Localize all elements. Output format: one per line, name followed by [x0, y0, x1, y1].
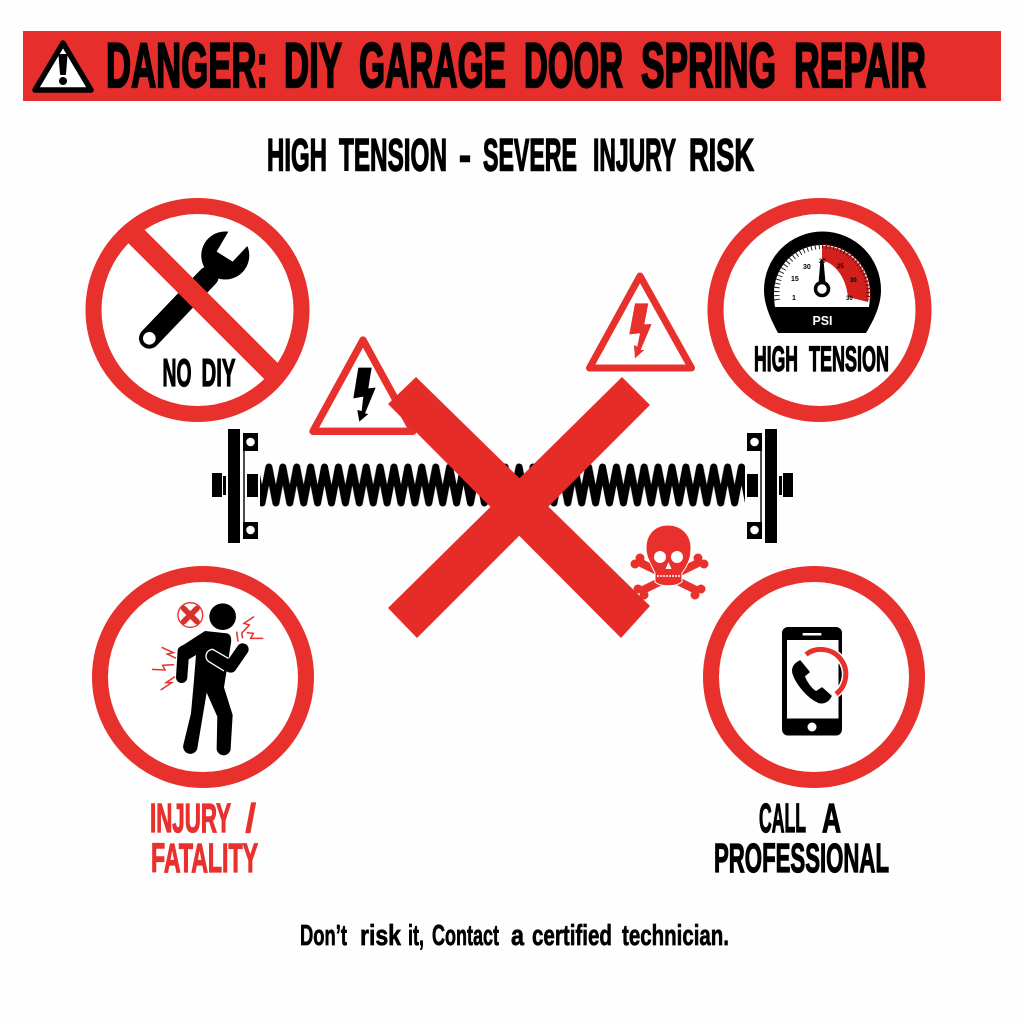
title: GARAGE [359, 31, 506, 101]
subtitle: HIGH [267, 130, 327, 180]
subtitle: SEVERE [483, 130, 577, 180]
label: call a professional [714, 795, 889, 881]
subtitle: - [459, 130, 471, 180]
big red X [388, 377, 650, 638]
title: SPRING [641, 31, 776, 101]
footer note [300, 920, 729, 952]
coil spring [260, 463, 745, 507]
label: injury / fatality: INJURY [150, 795, 231, 841]
label: injury / fatality: FATALITY [151, 835, 258, 881]
label: high tension: TENSION [809, 340, 889, 379]
label: no DIY: NO [162, 352, 192, 395]
spring assembly [212, 429, 793, 543]
icon: prohibition slash [128, 228, 272, 372]
icon: pressure gauge: PSI [812, 313, 832, 328]
icon: pain sparks [152, 617, 263, 690]
panel: no DIY [94, 206, 302, 414]
footer note: Contact [432, 920, 499, 952]
footer note: technician. [622, 920, 729, 952]
panel: call a professional [711, 574, 917, 780]
icon: pressure gauge: 30 [846, 296, 853, 302]
icon: pressure gauge: 30 [850, 278, 857, 284]
title: DOOR [524, 31, 623, 101]
subtitle: INJURY [593, 130, 676, 180]
icon: wrench [143, 231, 249, 345]
icon: pressure gauge: 1 [792, 295, 796, 302]
icon: pressure gauge: 30 [803, 264, 811, 271]
icon: skull and crossbones [630, 525, 708, 600]
label: high tension [754, 340, 889, 379]
label: injury / fatality: / [245, 795, 256, 841]
footer note: Don’t [300, 920, 347, 952]
icon: red call arc [806, 649, 846, 694]
icon: left electric warning triangle [313, 340, 413, 431]
subtitle: TENSION [339, 130, 447, 180]
title: REPAIR [794, 31, 926, 101]
footer note: a [511, 920, 525, 952]
footer note: certified [532, 920, 612, 952]
right mount [747, 429, 793, 543]
label: call a professional: CALL [759, 795, 806, 841]
icon: right electric warning triangle [590, 276, 692, 368]
icon: injured person [152, 603, 263, 755]
header banner [23, 31, 1001, 101]
icon: pressure gauge: 20 [819, 259, 826, 265]
icon: red X badge [178, 603, 203, 627]
icon: pressure gauge: 25 [837, 264, 844, 270]
label: call a professional: A [822, 795, 841, 841]
panel: high tension [716, 206, 924, 414]
icon: pressure gauge [764, 232, 881, 333]
title [106, 31, 926, 101]
title: DANGER: [106, 31, 268, 101]
label: high tension: HIGH [754, 340, 798, 379]
subtitle: RISK [689, 130, 754, 180]
icon: pressure gauge: 15 [791, 276, 799, 283]
icon: smartphone [782, 627, 846, 736]
label: no DIY: DIY [202, 352, 236, 395]
title: DIY [284, 31, 342, 101]
panel: injury [100, 574, 306, 780]
label: injury / fatality [150, 795, 258, 881]
footer note: it, [408, 920, 424, 952]
icon: warning triangle [35, 43, 91, 90]
footer note: risk [360, 920, 402, 952]
left mount [212, 429, 258, 543]
subtitle [267, 130, 754, 180]
icon: phone handset [793, 661, 831, 703]
